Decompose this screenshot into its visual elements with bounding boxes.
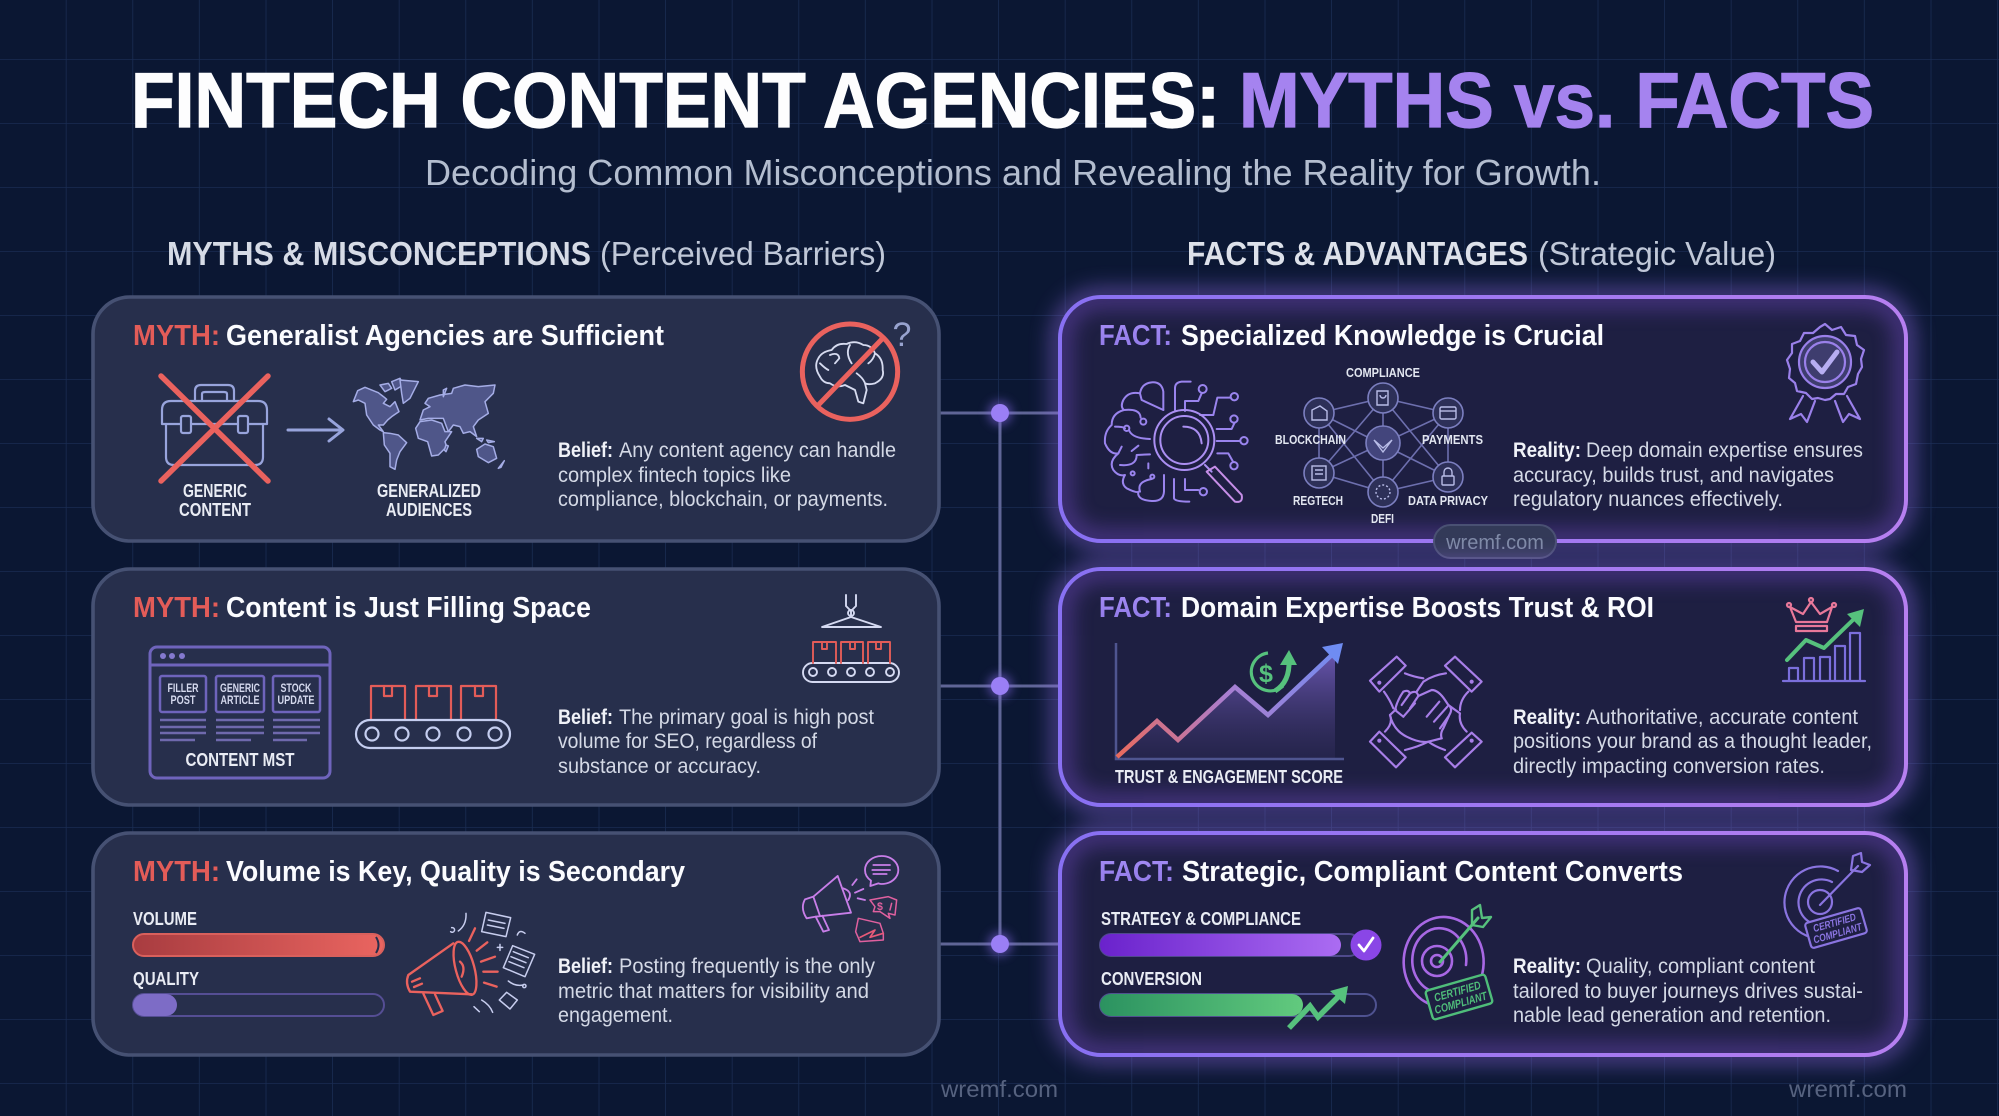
icon: target certified compliant bbox=[1404, 905, 1493, 1020]
belief text: Belief: bbox=[558, 955, 613, 978]
heading: facts column: (Strategic Value) bbox=[1538, 235, 1776, 272]
fact 3 heading: Strategic, Compliant Content Converts bbox=[1182, 856, 1683, 888]
icon: target small: COMPLIANT bbox=[1812, 921, 1865, 946]
label: generic content: GENERIC bbox=[183, 481, 247, 501]
icon: certified badge bbox=[1787, 324, 1864, 422]
watermark: centre: wremf.com bbox=[940, 1076, 1058, 1102]
bar: volume bbox=[133, 909, 384, 956]
belief text: engagement. bbox=[558, 1004, 673, 1027]
myth 2 heading: MYTH: bbox=[133, 592, 220, 624]
icon: content mill window: FILLER bbox=[168, 681, 199, 695]
chart: topic network: PAYMENTS bbox=[1422, 432, 1483, 447]
reality text: accuracy, builds trust, and navigates bbox=[1513, 464, 1834, 487]
fact 2 heading: Domain Expertise Boosts Trust & ROI bbox=[1181, 592, 1654, 624]
reality text: Quality, compliant content bbox=[1586, 955, 1815, 978]
label: generic content: CONTENT bbox=[179, 500, 251, 520]
arrow bbox=[288, 419, 343, 441]
heading: myths column: MYTHS & MISCONCEPTIONS bbox=[167, 235, 591, 272]
icon: handshake bbox=[1370, 657, 1482, 767]
title: MYTHS vs. FACTS bbox=[1239, 56, 1874, 144]
chart: topic network: BLOCKCHAIN bbox=[1275, 432, 1346, 447]
watermark: right: wremf.com bbox=[1788, 1076, 1907, 1102]
label: generalized audiences: GENERALIZED bbox=[377, 481, 481, 501]
icon: crossed out briefcase bbox=[161, 376, 268, 481]
heading: myths column: (Perceived Barriers) bbox=[600, 235, 886, 272]
belief text: Belief: bbox=[558, 706, 613, 729]
reality text: tailored to buyer journeys drives sustai- bbox=[1513, 980, 1863, 1003]
belief text bbox=[558, 955, 875, 1027]
fact 3 heading: FACT: bbox=[1099, 856, 1174, 888]
bar: conversion bbox=[1100, 969, 1376, 1028]
icon: target small: CERTIFIED bbox=[1812, 911, 1858, 935]
myth 1 heading: MYTH: bbox=[133, 320, 220, 352]
reality text: regulatory nuances effectively. bbox=[1513, 488, 1783, 511]
chart: topic network: REGTECH bbox=[1293, 493, 1343, 508]
icon: crown and growth bbox=[1783, 598, 1865, 681]
subtitle: Decoding Common Misconceptions and Revealing the Reality for Growth. bbox=[425, 152, 1601, 193]
reality text: Reality: bbox=[1513, 955, 1581, 978]
belief text bbox=[558, 439, 896, 511]
label: generalized audiences: AUDIENCES bbox=[386, 500, 472, 520]
icon: content mill window: UPDATE bbox=[278, 693, 314, 707]
icon: red megaphone bbox=[407, 912, 535, 1015]
icon: megaphone with chat: $ bbox=[877, 901, 883, 913]
icon: content mill window bbox=[150, 647, 330, 778]
panel: myth 3 volume bbox=[93, 833, 939, 1055]
belief text: Any content agency can handle bbox=[619, 439, 896, 462]
bar: volume: VOLUME bbox=[133, 909, 197, 929]
reality text: directly impacting conversion rates. bbox=[1513, 755, 1825, 778]
icon: no brain bbox=[802, 324, 898, 419]
myth 1 heading: Generalist Agencies are Sufficient bbox=[226, 320, 664, 352]
chart: topic network: DEFI bbox=[1371, 511, 1394, 526]
belief text: substance or accuracy. bbox=[558, 755, 761, 778]
icon: megaphone with chat bbox=[803, 856, 898, 942]
reality text bbox=[1513, 955, 1863, 1027]
icon: conveyor with boxes bbox=[356, 686, 510, 748]
chart: trust and engagement score: TRUST & ENGAGEMENT SCORE bbox=[1115, 767, 1343, 787]
heading: facts column: FACTS & ADVANTAGES bbox=[1187, 235, 1528, 272]
title bbox=[131, 56, 1874, 144]
reality text: Deep domain expertise ensures bbox=[1586, 439, 1863, 462]
belief text bbox=[558, 706, 874, 778]
panel: myth 2 filling space bbox=[93, 569, 939, 805]
reality text: Reality: bbox=[1513, 439, 1581, 462]
label: generalized audiences bbox=[377, 481, 481, 520]
panel: myth 1 generalist agencies bbox=[93, 297, 939, 541]
chart: trust and engagement score bbox=[1115, 643, 1344, 787]
bar: quality bbox=[133, 969, 384, 1016]
icon: target certified compliant: CERTIFIED bbox=[1433, 980, 1482, 1005]
belief text: Posting frequently is the only bbox=[619, 955, 875, 978]
connector between myths and facts bbox=[940, 401, 1058, 956]
belief text: complex fintech topics like bbox=[558, 464, 791, 487]
fact 1 heading: FACT: bbox=[1099, 320, 1172, 352]
reality text bbox=[1513, 706, 1872, 778]
myth 2 heading: Content is Just Filling Space bbox=[226, 592, 591, 624]
reality text: nable lead generation and retention. bbox=[1513, 1004, 1831, 1027]
icon: content mill window: POST bbox=[170, 693, 196, 707]
panel: fact 3 strategic content bbox=[1060, 833, 1906, 1055]
watermark pill: wremf.com bbox=[1445, 532, 1544, 554]
chart: topic network bbox=[1275, 365, 1488, 526]
heading: facts column bbox=[1187, 235, 1776, 272]
icon: dollar coin with arrow: $ bbox=[1259, 660, 1273, 688]
icon: target certified compliant: COMPLIANT bbox=[1433, 990, 1489, 1017]
belief text: metric that matters for visibility and bbox=[558, 980, 869, 1003]
icon: brain with magnifier bbox=[1105, 382, 1248, 502]
reality text: positions your brand as a thought leader, bbox=[1513, 730, 1872, 753]
myth 3 heading: MYTH: bbox=[133, 856, 220, 888]
panel: fact 2 domain expertise bbox=[1060, 569, 1906, 805]
watermark pill bbox=[1434, 525, 1556, 558]
myth 3 heading: Volume is Key, Quality is Secondary bbox=[226, 856, 685, 888]
belief text: The primary goal is high post bbox=[619, 706, 874, 729]
reality text: Reality: bbox=[1513, 706, 1581, 729]
icon: content mill window: CONTENT MST bbox=[186, 750, 294, 770]
belief text: volume for SEO, regardless of bbox=[558, 730, 817, 753]
icon: question mark: ? bbox=[893, 316, 911, 354]
icon: target small bbox=[1784, 853, 1870, 948]
icon: content mill window: GENERIC bbox=[220, 681, 260, 695]
icon: content mill window: STOCK bbox=[280, 681, 312, 695]
icon: world map bbox=[353, 378, 504, 469]
icon: content mill window: ARTICLE bbox=[220, 693, 260, 707]
bar: strategy and compliance: STRATEGY & COMPLIANCE bbox=[1101, 909, 1301, 929]
belief text: compliance, blockchain, or payments. bbox=[558, 488, 888, 511]
icon: dollar coin with arrow bbox=[1251, 650, 1297, 691]
bar: quality: QUALITY bbox=[133, 969, 199, 989]
panel: fact 1 specialized knowledge bbox=[1060, 297, 1906, 558]
reality text bbox=[1513, 439, 1863, 511]
chart: topic network: COMPLIANCE bbox=[1346, 365, 1420, 380]
fact 2 heading: FACT: bbox=[1099, 592, 1172, 624]
chart: topic network: DATA PRIVACY bbox=[1408, 493, 1488, 508]
bar: conversion: CONVERSION bbox=[1101, 969, 1202, 989]
bar: strategy and compliance bbox=[1100, 909, 1382, 960]
heading: myths column bbox=[167, 235, 886, 272]
belief text: Belief: bbox=[558, 439, 613, 462]
icon: factory hook bbox=[803, 595, 899, 682]
title: FINTECH CONTENT AGENCIES: bbox=[131, 56, 1220, 144]
reality text: Authoritative, accurate content bbox=[1586, 706, 1858, 729]
label: generic content bbox=[179, 481, 251, 520]
fact 1 heading: Specialized Knowledge is Crucial bbox=[1181, 320, 1604, 352]
